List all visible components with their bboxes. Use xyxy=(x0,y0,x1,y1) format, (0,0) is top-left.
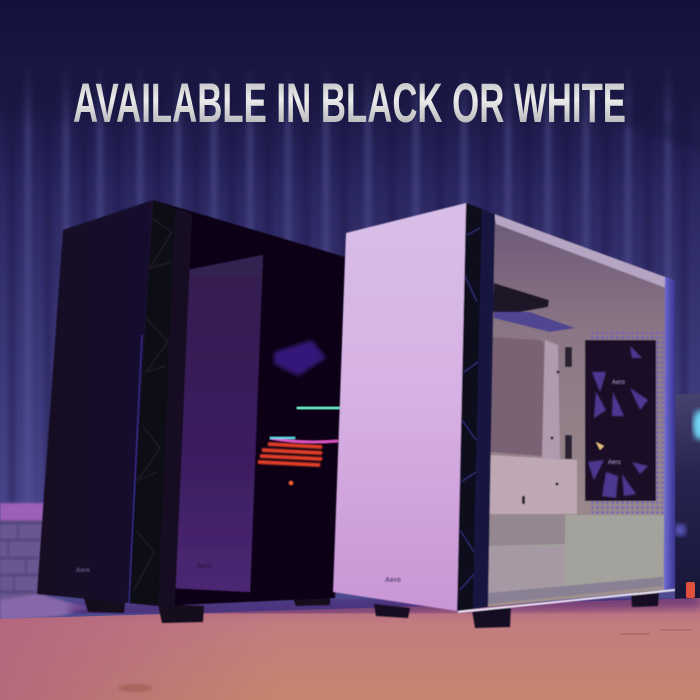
tray column xyxy=(542,340,560,460)
black panel logo: Aero xyxy=(197,563,212,570)
white case interior xyxy=(486,212,668,607)
black case front panel xyxy=(37,200,153,603)
small red LED xyxy=(289,481,293,485)
bottom edge xyxy=(458,589,675,613)
RGB ring light xyxy=(270,438,338,442)
fan logos: Aero xyxy=(612,380,625,386)
top rail xyxy=(494,214,668,288)
black PC case xyxy=(37,200,345,623)
stone ledge, left xyxy=(0,503,90,621)
red memory lights xyxy=(258,444,322,465)
rear fan mesh panel xyxy=(585,332,665,514)
white case feet xyxy=(374,588,659,628)
white case vent strip xyxy=(457,203,482,611)
black case logo: Aero xyxy=(76,568,90,574)
white case pillar xyxy=(473,209,495,609)
black case glass side xyxy=(153,200,345,606)
table top xyxy=(0,598,700,700)
black case RGB fan reflection xyxy=(274,340,326,376)
black case vent strip xyxy=(128,200,175,606)
PSU shroud xyxy=(488,515,664,593)
black case pillar xyxy=(158,208,192,606)
monitor, right background xyxy=(674,394,700,604)
top shelf and bracket xyxy=(493,283,549,312)
black case feet xyxy=(84,592,330,623)
white tray plate xyxy=(489,455,577,514)
cable grommets xyxy=(522,347,572,504)
rear dual fans xyxy=(585,340,656,501)
fan light glint xyxy=(596,442,604,450)
white case front panel xyxy=(333,203,466,611)
green and cyan light line xyxy=(297,407,340,409)
rear fan mesh panel: Aero xyxy=(608,460,621,466)
motherboard tray panel xyxy=(490,337,544,456)
rear post xyxy=(664,277,675,590)
white PC case xyxy=(333,203,675,628)
white case logo: Aero xyxy=(385,577,401,584)
black case interior reflection panel xyxy=(171,255,263,592)
